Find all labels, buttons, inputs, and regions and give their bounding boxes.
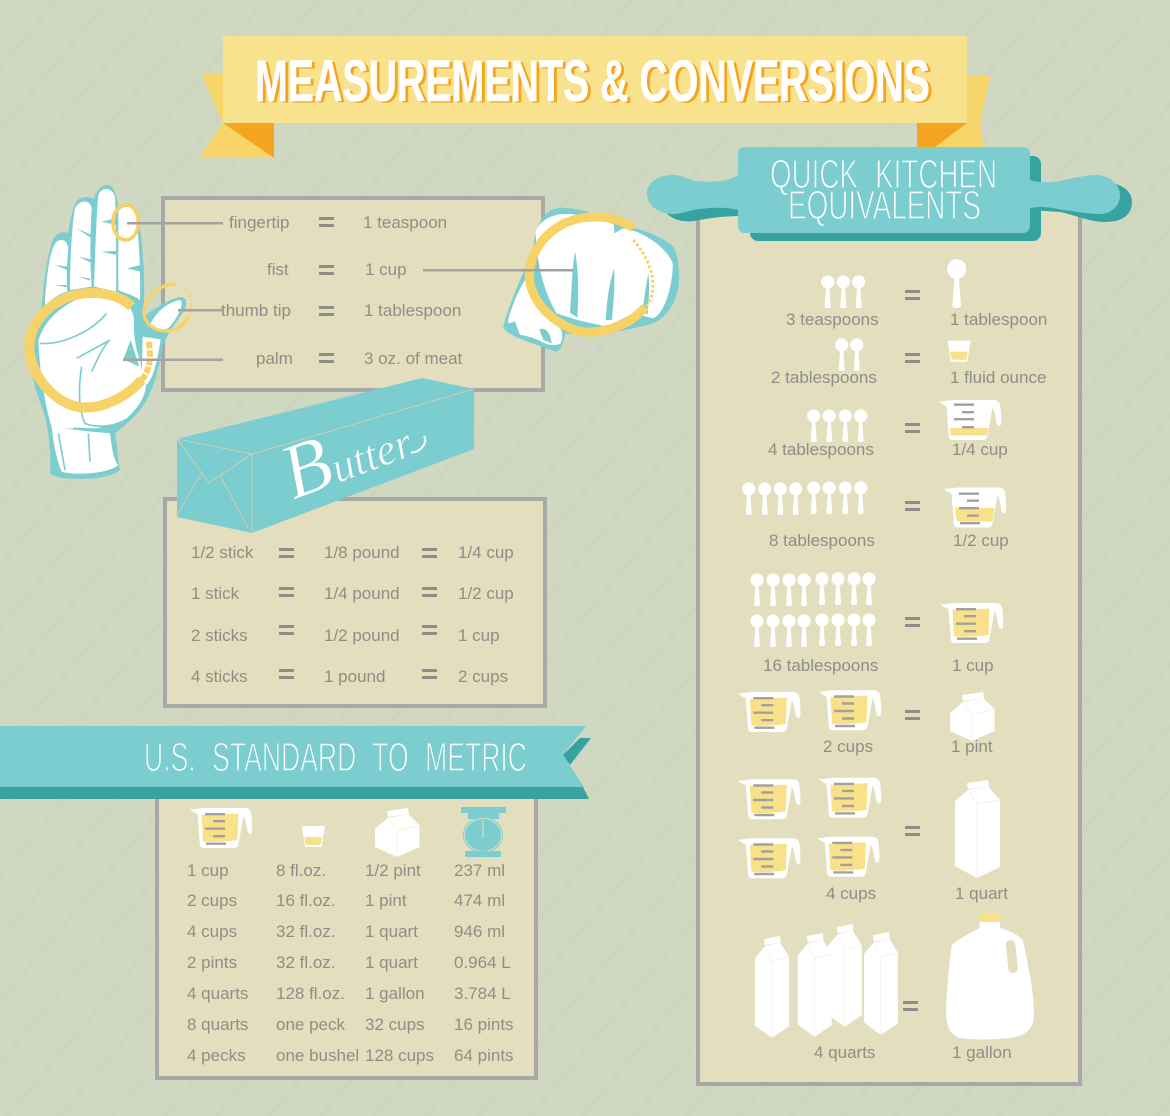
equivalence: 4 cups: 4 cups: [826, 884, 876, 903]
equivalence: 2 cups: 1 pint: [951, 737, 993, 756]
equivalence: 2 cups: [738, 690, 994, 756]
row 2: 1 pint: [365, 891, 407, 910]
row: palm: 3 oz. of meat: [364, 349, 463, 368]
icon: measuring cup: [190, 808, 252, 848]
row 4: 1 quart: [365, 953, 418, 972]
panel: metric table: [157, 790, 536, 1078]
row 1: 1/2 pint: [365, 861, 421, 880]
row: fist: 1 cup: [365, 260, 407, 279]
row 3: 946 ml: [454, 922, 505, 941]
row 5: 128 fl.oz.: [276, 984, 345, 1003]
equivalence: 2 tablespoons: [771, 338, 1046, 387]
row 6: 16 pints: [454, 1015, 514, 1034]
panel: kitchen equivalents: [698, 205, 1080, 1084]
row 4: [187, 953, 511, 972]
row: fingertip: 1 teaspoon: [363, 213, 447, 232]
leader line: fingertip: [127, 222, 223, 224]
row: 4 sticks: [191, 667, 508, 686]
butter label: [268, 384, 435, 516]
row 2: [187, 891, 505, 910]
row: fingertip: [229, 213, 447, 232]
row: 1/2 stick: 1/2 stick: [191, 543, 254, 562]
row: 1 stick: [191, 584, 514, 603]
equivalence: 4 cups: [738, 778, 1008, 903]
icon: scale: [461, 807, 506, 857]
icon: gallon jug: [946, 913, 1034, 1040]
row 6: [187, 1015, 514, 1034]
equivalence: 4 tablespoons: 4 tablespoons: [768, 440, 874, 459]
row 7: [187, 1046, 514, 1065]
row 6: one peck: [276, 1015, 345, 1034]
equivalence: 2 tablespoons: 2 tablespoons: [771, 368, 877, 387]
row 3: [187, 922, 505, 941]
row: fist: fist: [267, 260, 289, 279]
row 1: [187, 861, 505, 880]
row 5: [187, 984, 511, 1003]
equivalence: 8 tablespoons: 8 tablespoons: [769, 531, 875, 550]
row 7: one bushel: [276, 1046, 359, 1065]
row 1: 1 cup: [187, 861, 229, 880]
equivalence: 2 cups: 2 cups: [823, 737, 873, 756]
row 7: 128 cups: [365, 1046, 434, 1065]
equivalence: 8 tablespoons: [742, 481, 1009, 550]
row: 2 sticks: 2 sticks: [191, 626, 248, 645]
icon: open hand: [29, 185, 191, 479]
row: palm: [256, 349, 463, 368]
row 5: 3.784 L: [454, 984, 511, 1003]
row: thumb tip: thumb tip: [221, 301, 291, 320]
row 6: 32 cups: [365, 1015, 425, 1034]
row: 1/2 stick: [191, 543, 514, 562]
panel: butter table: [165, 499, 545, 706]
row 6: 8 quarts: [187, 1015, 248, 1034]
equivalence: 4 quarts: 1 gallon: [952, 1043, 1012, 1062]
row 2: 2 cups: [187, 891, 237, 910]
panel: hand measures: [163, 198, 543, 390]
butter label: Butter: [268, 388, 422, 516]
row 2: 16 fl.oz.: [276, 891, 336, 910]
row: 2 sticks: [191, 625, 500, 645]
equivalence: 4 quarts: 4 quarts: [814, 1043, 875, 1062]
row: 4 sticks: 2 cups: [458, 667, 508, 686]
icon: fist: [503, 208, 679, 352]
equivalence: 16 tablespoons: [750, 572, 1003, 675]
leader line: palm: [123, 358, 223, 361]
row 7: 64 pints: [454, 1046, 514, 1065]
equivalence: 3 teaspoons: 3 teaspoons: [786, 310, 879, 329]
icon: milk carton: [375, 808, 420, 857]
row: 1 stick: 1 stick: [191, 584, 240, 603]
row 2: 474 ml: [454, 891, 505, 910]
row: 1 stick: 1/2 cup: [458, 584, 514, 603]
equivalence: 4 quarts: [755, 913, 1034, 1062]
ribbon: U.S. standard to metric: [0, 726, 591, 799]
leader line: fist: [423, 269, 573, 272]
icon: rolling pin: [647, 147, 1132, 241]
rolling pin heading: EQUIVALENTS: [788, 182, 981, 228]
row 3: 4 cups: [187, 922, 237, 941]
ring: palm: [29, 293, 150, 408]
equivalence: 4 tablespoons: [768, 400, 1008, 459]
row 3: 1 quart: [365, 922, 418, 941]
equivalence: 3 teaspoons: 1 tablespoon: [950, 310, 1047, 329]
rolling pin heading: QUICK KITCHEN: [770, 151, 997, 197]
row 4: 0.964 L: [454, 953, 511, 972]
equivalence: 16 tablespoons: 1 cup: [952, 656, 994, 675]
equivalence: 4 tablespoons: 1/4 cup: [952, 440, 1008, 459]
title ribbon: [199, 36, 990, 158]
row 4: 32 fl.oz.: [276, 953, 336, 972]
row: palm: palm: [256, 349, 293, 368]
equivalence: 3 teaspoons: [786, 259, 1047, 329]
row 4: 2 pints: [187, 953, 237, 972]
ribbon right tail: [917, 76, 990, 150]
ribbon heading: U.S. STANDARD TO METRIC: [144, 734, 527, 780]
row: 2 sticks: 1 cup: [458, 626, 500, 645]
row: fist: [267, 260, 407, 279]
row 5: 1 gallon: [365, 984, 425, 1003]
icon: butter stick: [177, 378, 474, 533]
row: thumb tip: 1 tablespoon: [364, 301, 461, 320]
ring: fingertip: [113, 205, 138, 240]
ring: thumb tip: [144, 284, 191, 331]
row 1: 237 ml: [454, 861, 505, 880]
equivalence: 2 tablespoons: 1 fluid ounce: [950, 368, 1046, 387]
equivalence: 16 tablespoons: 16 tablespoons: [763, 656, 878, 675]
row 1: 8 fl.oz.: [276, 861, 326, 880]
ribbon left tail: [199, 73, 274, 158]
row 5: 4 quarts: [187, 984, 248, 1003]
equivalence: 8 tablespoons: 1/2 cup: [953, 531, 1009, 550]
icon: glass: [302, 826, 325, 847]
row: 4 sticks: 4 sticks: [191, 667, 248, 686]
row: 1/2 stick: 1/4 cup: [458, 543, 514, 562]
row: 1/2 stick: 1/8 pound: [324, 543, 400, 562]
rolling pin heading: [770, 151, 997, 228]
row: 2 sticks: 1/2 pound: [324, 626, 400, 645]
row 7: 4 pecks: [187, 1046, 246, 1065]
row: fingertip: fingertip: [229, 213, 289, 232]
row: 1 stick: 1/4 pound: [324, 584, 400, 603]
row: 4 sticks: 1 pound: [324, 667, 385, 686]
ribbon face: [223, 36, 967, 123]
equivalence: 4 cups: 1 quart: [955, 884, 1008, 903]
row: thumb tip: [221, 301, 461, 320]
ring: fist: [529, 217, 653, 332]
row 3: 32 fl.oz.: [276, 922, 336, 941]
leader line: thumb tip: [178, 309, 222, 312]
